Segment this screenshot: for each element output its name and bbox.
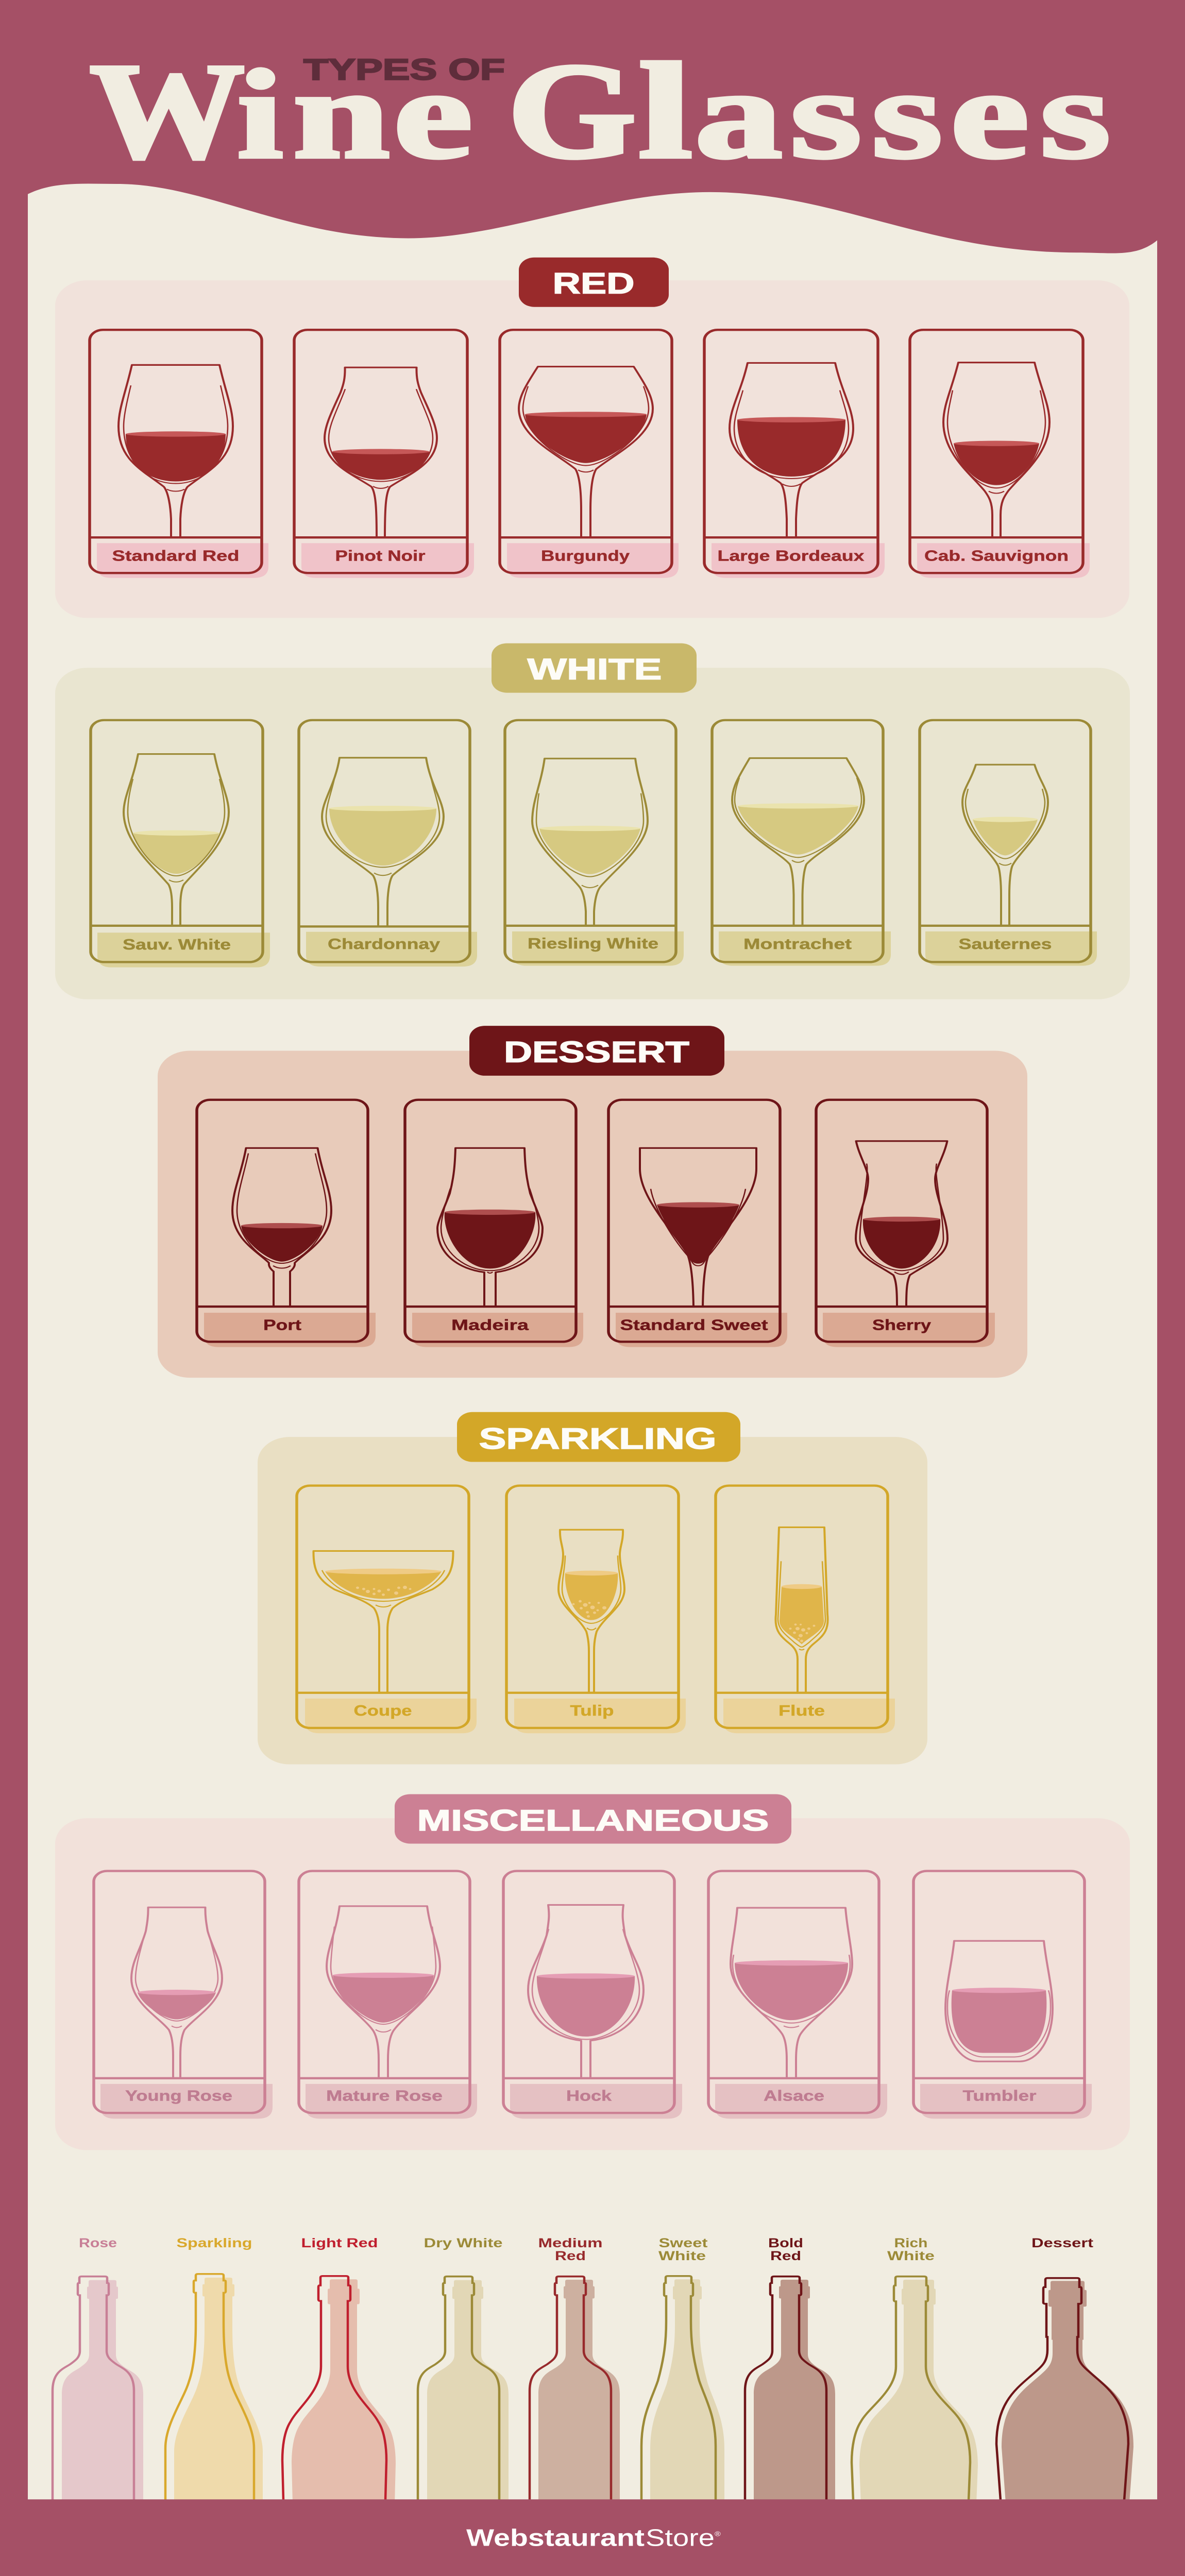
- glass: Standard Sweet: [640, 1148, 756, 1307]
- badge: dessert: DESSERT: [504, 1036, 689, 1069]
- subtitle: Types of: TYPES OF: [303, 53, 505, 86]
- title word: Wine: n: [293, 44, 390, 184]
- label: Young Rose: Young Rose: [125, 2088, 232, 2104]
- label: Large Bordeaux: Large Bordeaux: [717, 548, 865, 564]
- card: Cab. Sauvignon: [910, 330, 1090, 578]
- label: Flute: Flute: [778, 1703, 825, 1719]
- badge: miscellaneous: MISCELLANEOUS: [417, 1804, 769, 1837]
- title word: Glasses: s: [790, 44, 861, 184]
- panel: sparkling: [258, 1412, 927, 1765]
- title word: Glasses: a: [695, 44, 782, 184]
- card: Tumbler: [913, 1871, 1092, 2119]
- glass: Burgundy: [519, 367, 653, 537]
- bottle: Sweet White: [641, 2236, 724, 2504]
- card: Young Rose: [94, 1871, 273, 2119]
- card: Standard Red: [90, 330, 268, 578]
- bubbles: Coupe: [356, 1586, 411, 1596]
- card: Coupe: [297, 1486, 477, 1733]
- bottles row: [53, 2236, 1133, 2504]
- title word: Glasses: s: [872, 44, 942, 184]
- label: Chardonnay: Chardonnay: [328, 936, 440, 952]
- label: Pinot Noir: Pinot Noir: [335, 548, 426, 564]
- label: Coupe: Coupe: [354, 1703, 412, 1719]
- title word: Glasses: e: [951, 44, 1029, 184]
- glass: Tulip: [558, 1530, 624, 1693]
- card: Riesling White: [505, 720, 684, 966]
- card: Tulip: [506, 1486, 686, 1733]
- bottle label: Medium Red: Red: [555, 2249, 586, 2263]
- bottle: Dessert: [996, 2236, 1133, 2503]
- label: Sherry: Sherry: [872, 1317, 931, 1333]
- bottle: Dry White: [418, 2236, 509, 2504]
- bottle label: Rose: Rose: [79, 2236, 117, 2250]
- bottle label: Bold Red: Bold: [768, 2236, 803, 2250]
- glass: Standard Red: [118, 365, 233, 537]
- bottle label: Rich White: White: [887, 2249, 935, 2263]
- label: Cab. Sauvignon: Cab. Sauvignon: [924, 548, 1069, 564]
- glass: Mature Rose: [327, 1906, 440, 2078]
- bottle label: Sweet White: White: [658, 2249, 706, 2263]
- badge: white: [492, 643, 697, 693]
- bubbles: Tulip: [572, 1600, 606, 1618]
- glass: Young Rose: [131, 1907, 222, 2078]
- footer logo: Webstaurant: [466, 2525, 645, 2551]
- label: Alsace: Alsace: [764, 2088, 824, 2104]
- card: Mature Rose: [299, 1871, 477, 2119]
- footer logo: ®: [715, 2531, 721, 2538]
- bottle: Rose: [53, 2236, 143, 2504]
- label: Standard Red: Standard Red: [112, 548, 239, 564]
- panel: red: [55, 258, 1129, 618]
- bottle label: Medium Red: Medium: [538, 2236, 603, 2250]
- card: Sauv. White: [91, 720, 270, 968]
- label: Tumbler: Tumbler: [963, 2088, 1037, 2104]
- badge: red: [519, 258, 669, 307]
- card: Hock: [503, 1871, 682, 2119]
- glass: Large Bordeaux: [730, 363, 853, 537]
- label: Mature Rose: Mature Rose: [326, 2088, 443, 2104]
- title word: Wine: e: [394, 44, 472, 184]
- label: Riesling White: Riesling White: [528, 936, 658, 952]
- title word: Wine: i: [238, 44, 283, 184]
- glass: Hock: [528, 1905, 644, 2078]
- card: Port: [197, 1100, 376, 1347]
- glass: Tumbler: [945, 1941, 1053, 2061]
- bottle: Light Red: [282, 2236, 396, 2504]
- bottle: Sparkling: [165, 2236, 263, 2504]
- glass: Flute: [775, 1527, 828, 1693]
- label: Hock: Hock: [566, 2088, 612, 2104]
- bottle label: Light Red: Light Red: [301, 2236, 378, 2250]
- label: Tulip: Tulip: [570, 1703, 614, 1719]
- glass: Alsace: [731, 1908, 852, 2078]
- card: Chardonnay: [299, 720, 477, 967]
- label: Sauv. White: Sauv. White: [123, 936, 231, 953]
- card: Sauternes: [920, 720, 1097, 966]
- title: [90, 36, 1110, 187]
- bottle label: Bold Red: Red: [770, 2249, 801, 2263]
- bottle: Rich White: [852, 2236, 978, 2504]
- bottle label: Dry White: Dry White: [424, 2236, 503, 2250]
- title word: Glasses: l: [638, 36, 692, 187]
- label: Madeira: Madeira: [451, 1317, 529, 1333]
- title word: Glasses: G: [507, 36, 636, 187]
- glass: Montrachet: [732, 758, 864, 926]
- badge: dessert: [469, 1026, 724, 1076]
- panel: white: [55, 643, 1130, 999]
- bubbles: Flute: [789, 1623, 815, 1642]
- glass: Chardonnay: [322, 758, 444, 926]
- card: Large Bordeaux: [704, 330, 885, 578]
- card: Montrachet: [712, 720, 891, 966]
- glass: Port: [232, 1148, 331, 1307]
- badge: white: WHITE: [528, 653, 662, 686]
- bottle: Bold Red: [745, 2236, 835, 2504]
- glass: Cab. Sauvignon: [943, 363, 1049, 537]
- badge: red: RED: [552, 267, 634, 300]
- card: Pinot Noir: [294, 330, 474, 578]
- footer bar: [0, 2499, 1185, 2576]
- card: Flute: [716, 1486, 895, 1733]
- glass: Sauternes: [962, 765, 1048, 926]
- glass: Coupe: [313, 1551, 453, 1693]
- glass: Madeira: [437, 1148, 543, 1307]
- bottle label: Sparkling: Sparkling: [177, 2236, 252, 2250]
- bottle label: Rich White: Rich: [894, 2236, 928, 2250]
- title word: Glasses: s: [1040, 44, 1110, 184]
- badge: miscellaneous: [395, 1794, 791, 1843]
- label: Port: Port: [263, 1317, 301, 1333]
- card: Standard Sweet: [608, 1100, 787, 1347]
- badge: sparkling: SPARKLING: [479, 1422, 716, 1455]
- label: Standard Sweet: Standard Sweet: [620, 1317, 768, 1333]
- title word: Wine: W: [90, 36, 245, 187]
- bottle label: Dessert: Dessert: [1031, 2236, 1093, 2250]
- card: Alsace: [708, 1871, 887, 2119]
- glass: Sauv. White: [124, 754, 229, 926]
- glass: Riesling White: [532, 758, 648, 926]
- card: Sherry: [816, 1100, 995, 1347]
- glass: Pinot Noir: [325, 367, 437, 537]
- label: Sauternes: Sauternes: [959, 936, 1052, 952]
- label: Burgundy: Burgundy: [541, 548, 630, 564]
- bottle: Medium Red: [530, 2236, 620, 2504]
- label: Montrachet: Montrachet: [743, 936, 852, 952]
- card: Burgundy: [500, 330, 679, 578]
- glass: Sherry: [856, 1141, 947, 1307]
- panel: miscellaneous: [55, 1794, 1130, 2150]
- card: Madeira: [405, 1100, 583, 1347]
- panel: dessert: [158, 1026, 1027, 1378]
- footer logo: Store: [646, 2525, 715, 2551]
- badge: sparkling: [457, 1412, 740, 1462]
- bottle label: Sweet White: Sweet: [658, 2236, 708, 2250]
